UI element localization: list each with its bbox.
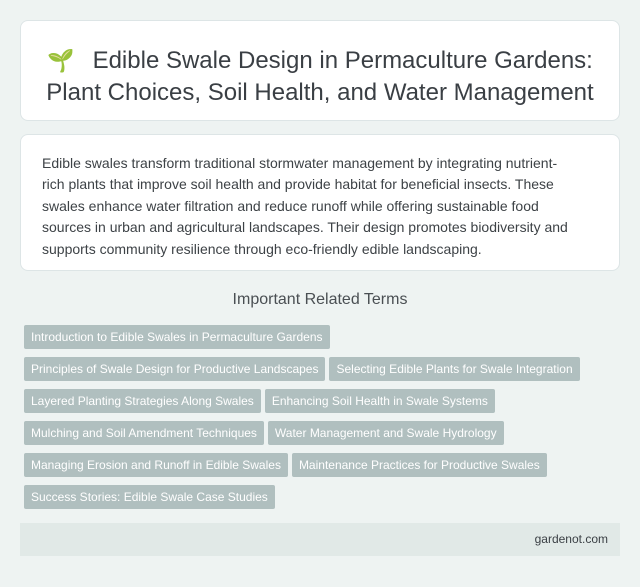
footer bbox=[20, 523, 620, 556]
tag list: Success Stories: Edible Swale Case Studies bbox=[31, 490, 268, 504]
tag list: Selecting Edible Plants for Swale Integration bbox=[336, 362, 573, 376]
tag list: Principles of Swale Design for Productive Landscapes bbox=[31, 362, 318, 376]
tag list: Enhancing Soil Health in Swale Systems bbox=[272, 394, 488, 408]
title card bbox=[20, 20, 620, 121]
title card: Plant Choices, Soil Health, and Water Management bbox=[46, 79, 594, 106]
tag list: Mulching and Soil Amendment Techniques bbox=[31, 426, 257, 440]
tag list: Layered Planting Strategies Along Swales bbox=[31, 394, 254, 408]
title card: 🌱 Edible Swale Design in Permaculture Gardens: bbox=[47, 47, 593, 74]
description text bbox=[20, 134, 620, 271]
tag list: Introduction to Edible Swales in Permaculture Gardens bbox=[31, 330, 322, 344]
description text: Edible swales transform traditional stormwater management by integrating nutrient-rich plants that improve soil health and provide habitat for beneficial insects. These swales enhance water filtration and reduce runoff while offering sustainable food sources in urban and agricultural landscapes. Their design promotes biodiversity and supports community resilience through eco-friendly edible landscaping. bbox=[42, 155, 568, 257]
tag list: Water Management and Swale Hydrology bbox=[275, 426, 497, 440]
tag list: Managing Erosion and Runoff in Edible Swales bbox=[31, 458, 281, 472]
tag list: Maintenance Practices for Productive Swales bbox=[299, 458, 540, 472]
footer: gardenot.com bbox=[535, 532, 608, 546]
heading: related terms: Important Related Terms bbox=[233, 291, 407, 308]
tag list bbox=[24, 325, 580, 509]
